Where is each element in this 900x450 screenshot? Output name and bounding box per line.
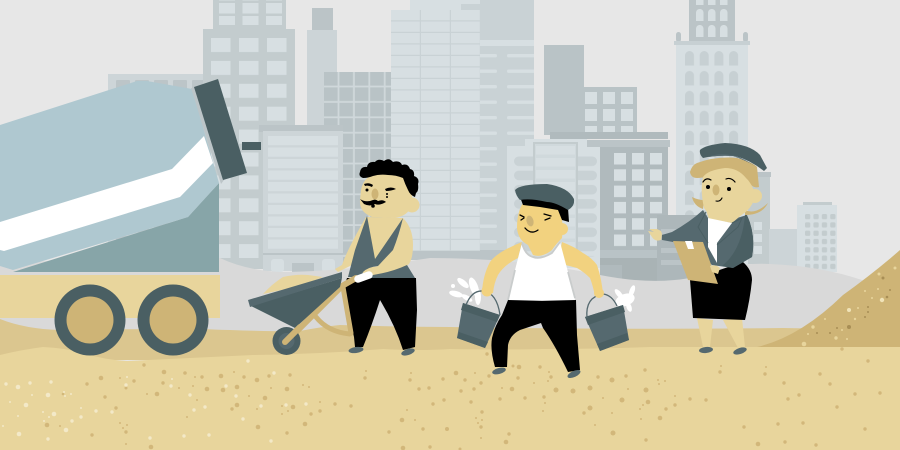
neck and head xyxy=(517,203,563,256)
jacket shade xyxy=(722,215,753,268)
wheelbarrow rim xyxy=(248,272,342,307)
building: arched clock tower xyxy=(674,0,771,266)
truck chassis xyxy=(0,275,220,318)
building: dark block xyxy=(544,45,584,135)
building: grid facade xyxy=(324,72,391,262)
worker with wheelbarrow xyxy=(248,159,420,357)
ear xyxy=(748,189,762,203)
cap xyxy=(515,184,574,210)
right water splash xyxy=(613,285,636,313)
front sand xyxy=(0,347,900,450)
grey ground mound xyxy=(0,258,900,345)
building: low block behind truck xyxy=(108,74,233,274)
hair xyxy=(520,197,569,222)
building: tall pale tower xyxy=(391,0,490,260)
clipboard clip xyxy=(685,241,694,249)
drum rim xyxy=(191,88,224,184)
building: small windowed block xyxy=(582,87,637,139)
building: narrow tower with cap xyxy=(307,8,337,130)
right bucket xyxy=(585,294,629,351)
pants xyxy=(491,300,580,372)
wheelbarrow load xyxy=(263,275,323,294)
lid latch xyxy=(242,142,261,150)
left water splash xyxy=(448,276,481,305)
drum white stripe xyxy=(0,136,213,251)
building: small dotted tower xyxy=(797,202,837,272)
side hair flicks xyxy=(692,197,768,215)
tank top xyxy=(508,242,575,300)
face details xyxy=(520,214,551,232)
head xyxy=(702,168,754,220)
building: right connector xyxy=(769,229,798,269)
building: slatted block xyxy=(259,125,343,272)
drum lid xyxy=(194,79,247,180)
worker with buckets xyxy=(448,184,636,380)
neck xyxy=(706,210,745,223)
hands xyxy=(482,286,604,298)
ear xyxy=(404,198,420,212)
torso and arms xyxy=(335,217,413,276)
front wheel xyxy=(54,284,126,356)
wheelbarrow tray xyxy=(251,278,342,328)
sand pile right xyxy=(757,250,900,348)
legs xyxy=(697,318,745,348)
pointing hand xyxy=(648,229,662,241)
pile specks xyxy=(802,266,896,346)
clipboard xyxy=(673,241,718,284)
cement mixer truck xyxy=(0,79,261,356)
supervisor with clipboard xyxy=(648,143,768,356)
building: rounded balconies xyxy=(507,139,600,268)
sand specks dark xyxy=(45,347,882,450)
jacket lapels xyxy=(698,212,742,245)
face details xyxy=(360,183,396,208)
wheelbarrow wheel xyxy=(272,327,300,355)
jacket xyxy=(662,210,753,268)
back sand layer xyxy=(0,319,900,360)
vest xyxy=(348,216,403,277)
mixer drum xyxy=(0,81,219,270)
shoes xyxy=(699,346,748,356)
arms xyxy=(482,242,603,296)
building: front low block xyxy=(657,215,707,282)
city skyline xyxy=(108,0,837,282)
shoes xyxy=(348,346,416,357)
wheelbarrow grip xyxy=(358,275,369,279)
holding hand xyxy=(710,265,720,274)
wheelbarrow handle and frame xyxy=(285,278,356,343)
truck cab base xyxy=(13,183,219,272)
rear wheel xyxy=(138,284,208,356)
pants xyxy=(343,278,417,350)
shoes xyxy=(491,366,582,380)
sand specks light xyxy=(2,359,308,443)
white shirt xyxy=(708,218,732,263)
left bucket xyxy=(457,291,500,348)
building: grey office tower xyxy=(203,0,295,269)
head xyxy=(360,172,412,218)
building: tower with dashes xyxy=(461,0,534,265)
hair xyxy=(690,158,759,187)
skirt xyxy=(690,262,752,320)
hat band xyxy=(708,154,757,167)
tank trim xyxy=(508,242,575,300)
building: large windowed block xyxy=(550,132,670,282)
ear xyxy=(556,223,568,235)
curly hair xyxy=(359,159,418,197)
hat xyxy=(700,143,767,171)
face details xyxy=(703,178,735,201)
vest lower panel xyxy=(361,265,415,278)
